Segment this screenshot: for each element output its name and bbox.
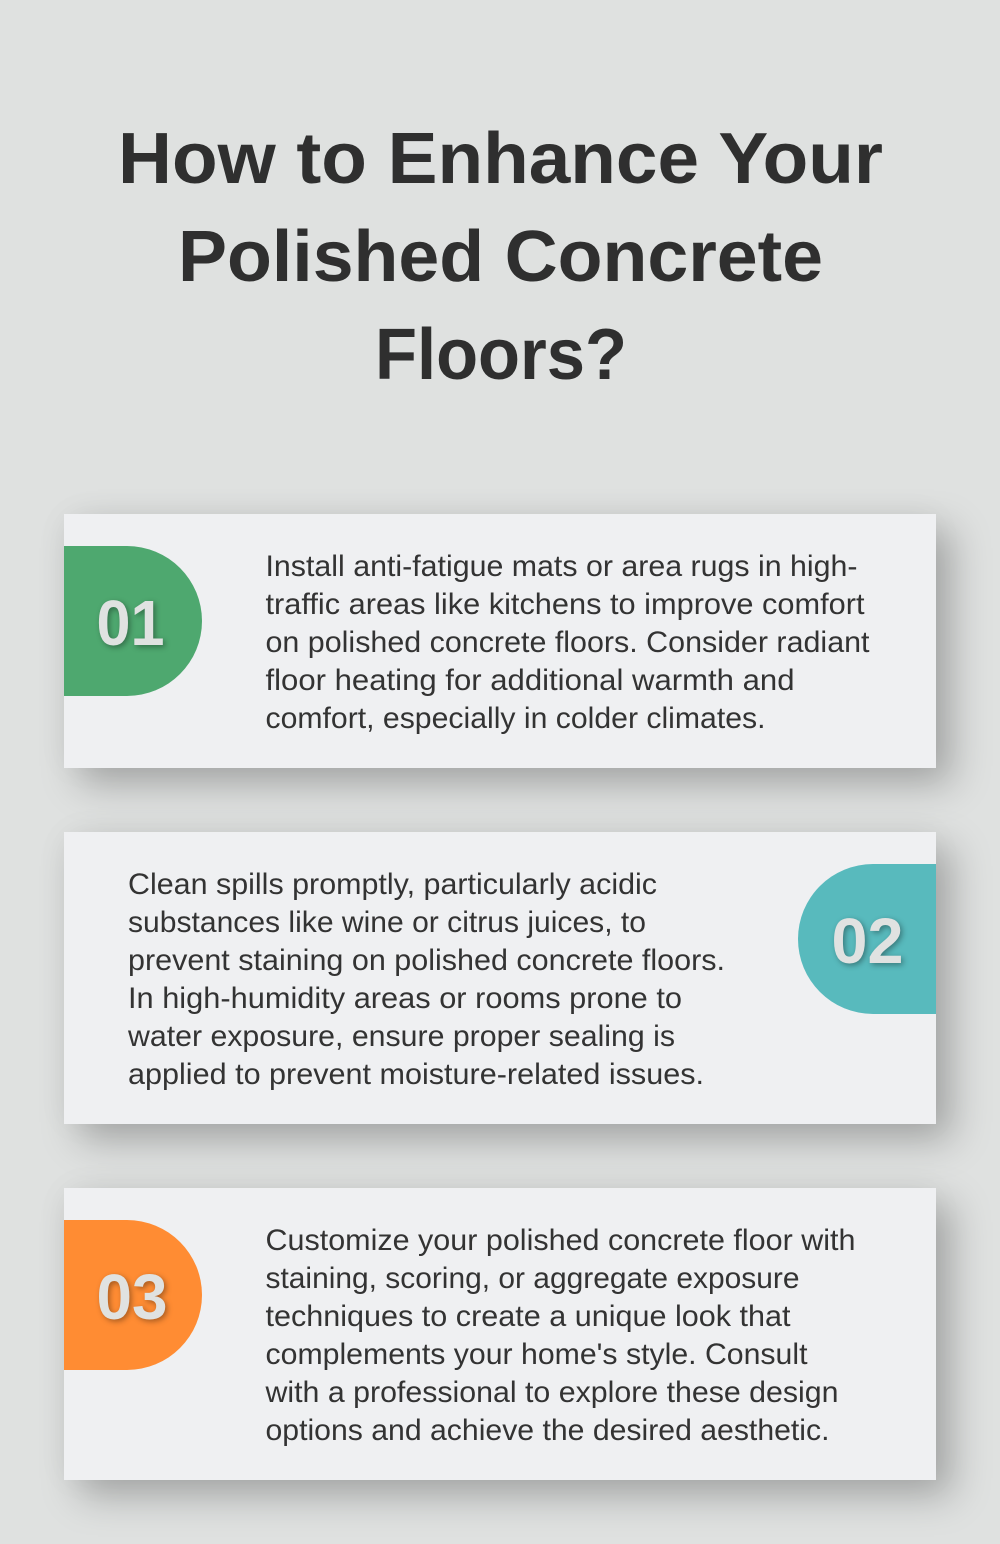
text block: step 01: floor heating for additional warmth and bbox=[266, 664, 794, 697]
text block: step 02: prevent staining on polished concrete floors. bbox=[128, 944, 725, 977]
text block: step 03: staining, scoring, or aggregate exposure bbox=[266, 1262, 800, 1295]
badge: 02 bbox=[798, 864, 936, 1014]
text block: step 02: substances like wine or citrus juices, to bbox=[128, 906, 646, 939]
number: 02: 02 bbox=[832, 905, 904, 977]
badge: 01 bbox=[64, 546, 202, 696]
text block: step 01: traffic areas like kitchens to improve comfort bbox=[266, 588, 865, 621]
text block: step 02: Clean spills promptly, particularly acidic bbox=[128, 868, 657, 901]
text block: step 01 bbox=[266, 550, 870, 735]
text block: step 01: Install anti-fatigue mats or area rugs in high- bbox=[266, 550, 858, 583]
text block: step 01: comfort, especially in colder climates. bbox=[266, 702, 766, 735]
text block: step 02: applied to prevent moisture-related issues. bbox=[128, 1058, 704, 1091]
title bbox=[118, 119, 883, 395]
text block: step 03: with a professional to explore these design bbox=[264, 1376, 838, 1409]
badge: 03 bbox=[64, 1220, 202, 1370]
panel: step 03 bbox=[64, 1188, 936, 1480]
text block: step 01: on polished concrete floors. Consider radiant bbox=[266, 626, 870, 659]
text block: step 03: complements your home's style. Consult bbox=[266, 1338, 808, 1371]
text block: step 02 bbox=[127, 868, 725, 1091]
title: Polished Concrete bbox=[178, 217, 823, 297]
text block: step 03: options and achieve the desired aesthetic. bbox=[266, 1414, 830, 1447]
number: 01: 01 bbox=[96, 587, 164, 659]
panel: step 02 bbox=[64, 832, 936, 1124]
title: Floors? bbox=[375, 315, 627, 395]
text block: step 03: techniques to create a unique look that bbox=[266, 1300, 791, 1333]
number: 03: 03 bbox=[96, 1261, 168, 1333]
text block: step 02: water exposure, ensure proper sealing is bbox=[127, 1020, 675, 1053]
text block: step 03: Customize your polished concrete floor with bbox=[266, 1224, 856, 1257]
panel: step 01 bbox=[64, 514, 936, 768]
text block: step 03 bbox=[264, 1224, 856, 1447]
title: How to Enhance Your bbox=[118, 119, 883, 199]
text block: step 02: In high-humidity areas or rooms prone to bbox=[128, 982, 682, 1015]
